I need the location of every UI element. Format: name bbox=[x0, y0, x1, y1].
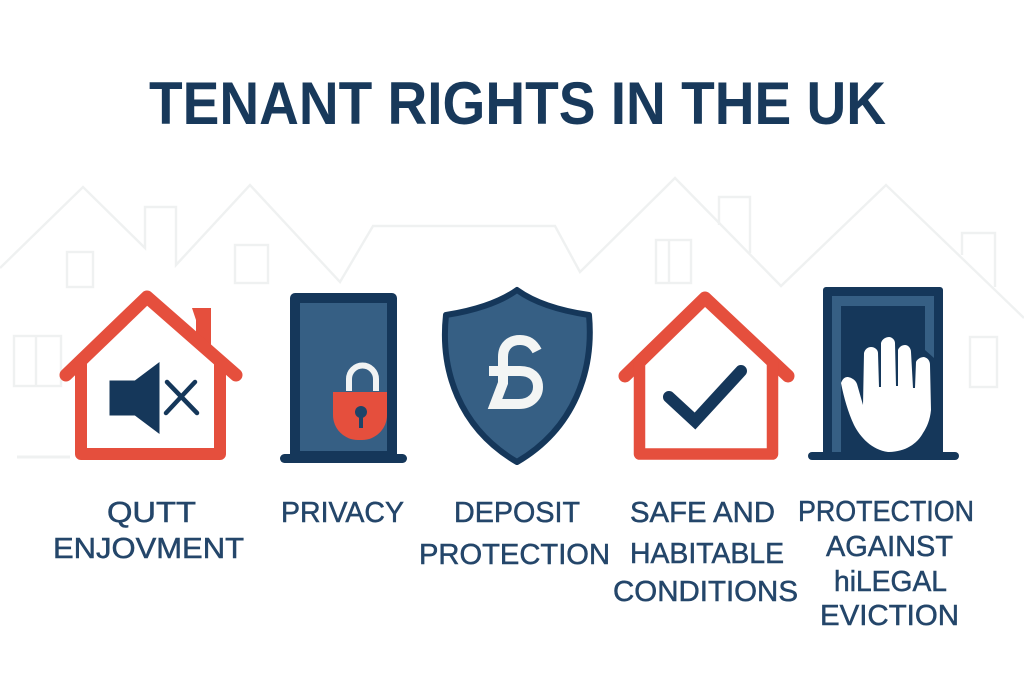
label: privacy: PRIVACY bbox=[281, 497, 404, 529]
label: deposit protection: PROTECTION bbox=[419, 539, 610, 571]
label: quiet enjoyment: QUTT bbox=[107, 497, 196, 529]
label: safe and habitable conditions: SAFE AND bbox=[630, 497, 775, 529]
label: quiet enjoyment: ENJOVMENT bbox=[53, 533, 244, 565]
icon: door with padlock bbox=[280, 298, 407, 463]
label: deposit protection bbox=[419, 497, 610, 571]
title: TENANT RIGHTS IN THE UK bbox=[149, 70, 886, 137]
label: deposit protection: DEPOSIT bbox=[454, 497, 580, 529]
icon: shield with pound sign bbox=[445, 290, 590, 462]
label: safe and habitable conditions bbox=[613, 497, 798, 608]
label: safe and habitable conditions: CONDITIONS bbox=[613, 576, 798, 608]
label: protection against illegal eviction bbox=[798, 496, 974, 632]
background: house outlines bbox=[0, 178, 1024, 457]
icon: doorway with stop hand bbox=[808, 287, 959, 460]
label: protection against illegal eviction: hiLEGAL bbox=[834, 566, 947, 598]
label: protection against illegal eviction: EVICTION bbox=[820, 600, 959, 632]
icon: house with muted speaker bbox=[66, 297, 236, 454]
label: safe and habitable conditions: HABITABLE bbox=[630, 538, 784, 570]
label: protection against illegal eviction: PROTECTION bbox=[798, 496, 974, 528]
icon: house with check mark bbox=[625, 298, 788, 454]
label: protection against illegal eviction: AGAINST bbox=[826, 531, 953, 563]
label: quiet enjoyment bbox=[53, 497, 244, 565]
